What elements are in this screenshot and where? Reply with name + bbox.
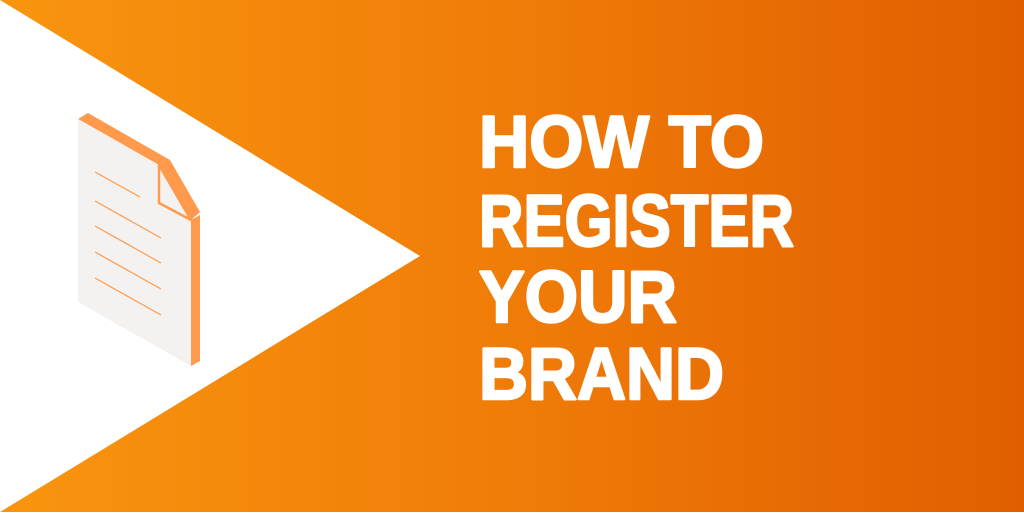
title: BRAND [479, 334, 724, 415]
title [479, 102, 794, 415]
white triangle [0, 0, 420, 512]
title: REGISTER [479, 181, 794, 262]
title: HOW TO [479, 102, 764, 183]
icon: document [78, 113, 200, 366]
title: YOUR [479, 257, 677, 338]
